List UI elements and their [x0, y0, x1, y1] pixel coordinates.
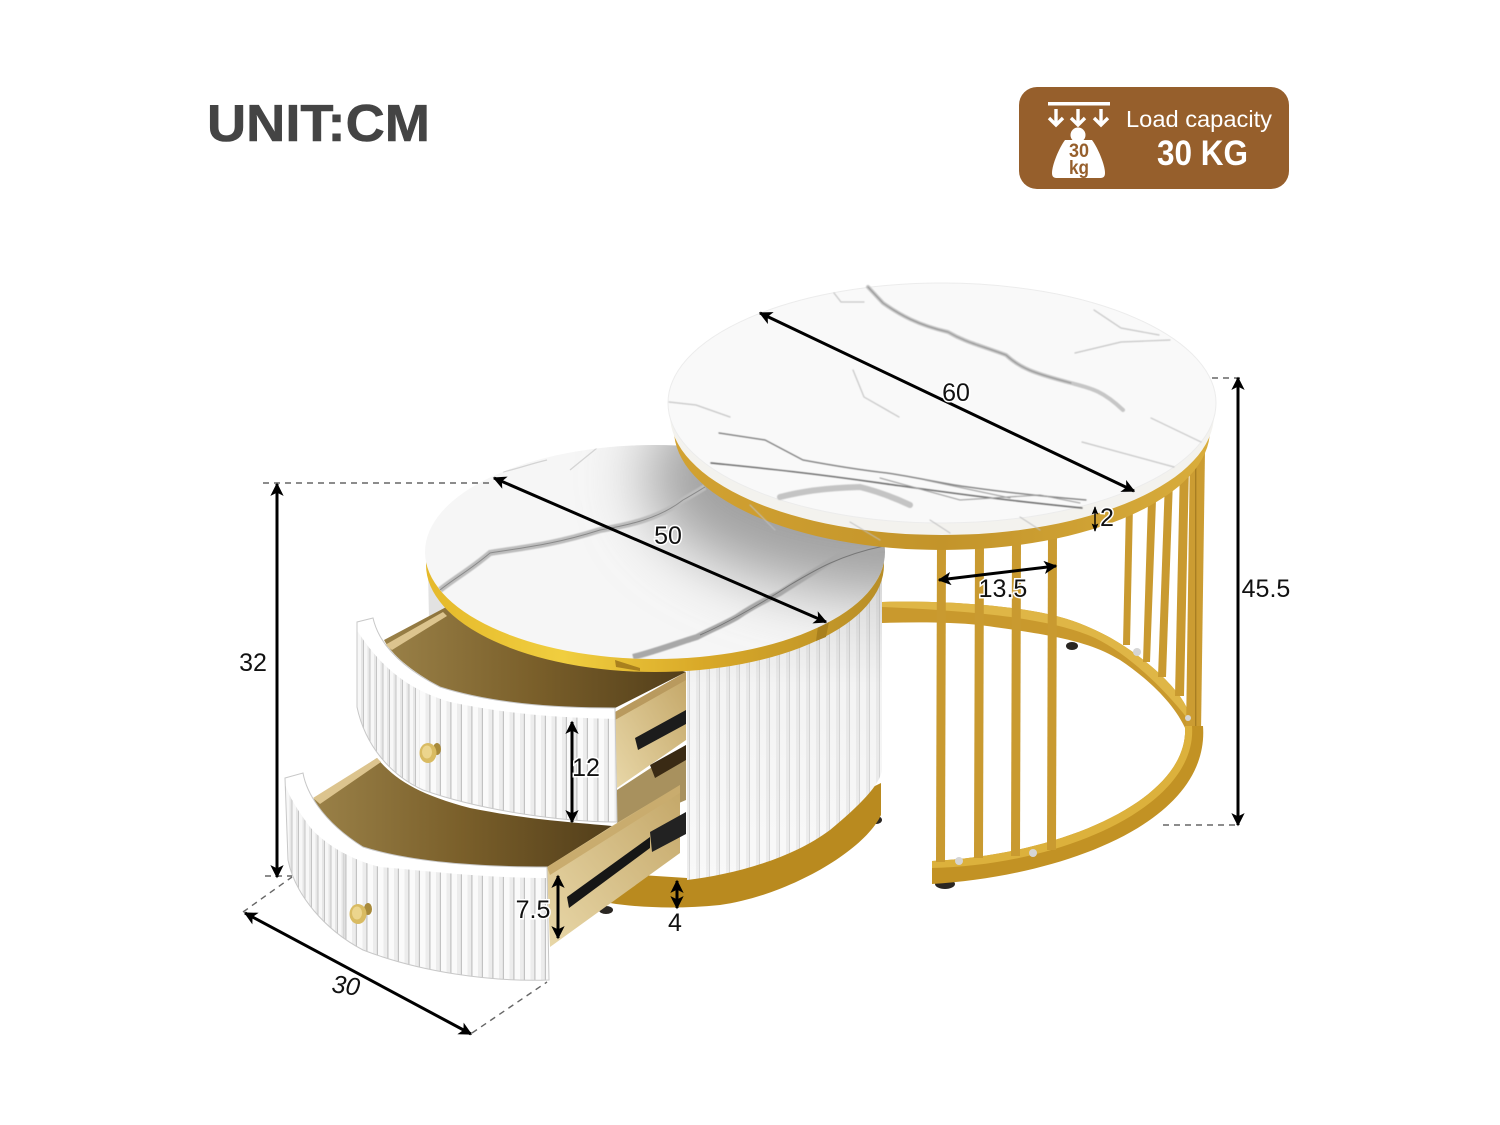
marble shadow and veins — [438, 445, 885, 659]
base ring: front — [932, 726, 1203, 884]
dimension: 50: 50 — [654, 522, 682, 550]
large table metal rim — [674, 310, 1210, 550]
lower space behind upper drawer — [617, 745, 686, 830]
large table top — [668, 283, 1216, 550]
dimension: 12: 12 — [572, 754, 600, 782]
small table foot — [599, 906, 613, 914]
icon: weight with arrows: 30 — [1069, 141, 1089, 162]
upper drawer side panel — [615, 672, 686, 788]
small table marble top — [425, 445, 885, 659]
dimension: 60: 60 — [942, 379, 970, 407]
lower drawer interior — [313, 758, 612, 868]
upper drawer outline — [357, 618, 617, 822]
rim seams — [615, 617, 830, 671]
base ring: back — [882, 602, 1190, 730]
lower drawer front — [286, 786, 546, 980]
dimension: 7.5 — [516, 876, 558, 938]
upper drawer left strip — [385, 612, 447, 650]
upper drawer front — [361, 636, 616, 822]
cabinet shade — [687, 580, 882, 880]
dimension: 32: 32 — [239, 649, 267, 677]
icon: weight with arrows: kg — [1069, 158, 1089, 179]
heading: unit: UNIT:CM — [207, 95, 430, 153]
cabinet back left — [428, 570, 480, 640]
lower drawer knob — [350, 903, 372, 924]
cabinet gold base — [610, 783, 881, 907]
lower side panel top edge — [547, 785, 680, 875]
dimension: 7.5: 7.5 — [516, 896, 550, 924]
lower rail — [567, 837, 650, 908]
dimension: 50 — [263, 478, 826, 622]
large table frame — [882, 450, 1205, 889]
dimension: 30: 30 — [330, 970, 362, 1002]
text: load capacity: Load capacity — [1126, 106, 1272, 132]
dimension: 30 — [243, 877, 547, 1034]
lower drawer side panel — [547, 785, 680, 947]
dimension: 4 — [668, 881, 682, 937]
ring front top face — [932, 726, 1192, 868]
dimension: 4: 4 — [668, 909, 682, 937]
lower rail block — [650, 812, 686, 852]
upper drawer interior — [384, 605, 686, 708]
badge: load capacity — [1019, 87, 1289, 189]
large table edge — [670, 295, 1214, 535]
dimension: 13.5 — [939, 566, 1056, 603]
lower drawer left strip — [313, 758, 381, 804]
dimension: 45.5 — [1163, 378, 1290, 825]
upper drawer knob — [420, 743, 441, 763]
rear foot — [870, 816, 882, 824]
bolts — [955, 648, 1191, 865]
dimension: 60 — [760, 313, 1134, 491]
upper side panel top edge — [615, 672, 686, 720]
small table with drawers — [284, 445, 885, 981]
dimension: 45.5: 45.5 — [1242, 575, 1290, 603]
dimension: 13.5: 13.5 — [979, 575, 1027, 603]
ring highlight — [882, 602, 1190, 718]
marble veins — [669, 287, 1201, 540]
text: 30 KG: 30 KG — [1157, 134, 1248, 173]
icon: weight with arrows — [1048, 102, 1110, 179]
cabinet fluted body — [687, 580, 882, 880]
right legs — [1123, 450, 1205, 732]
lower drawer outline — [285, 773, 549, 980]
dark gap — [650, 745, 686, 778]
front legs — [936, 535, 1057, 862]
large table marble surface — [668, 283, 1216, 523]
feet — [935, 642, 1078, 889]
dimension: 2: 2 — [1100, 504, 1114, 532]
small table rim — [426, 458, 884, 672]
upper rail — [635, 710, 686, 750]
dimension: 12 — [572, 722, 600, 822]
